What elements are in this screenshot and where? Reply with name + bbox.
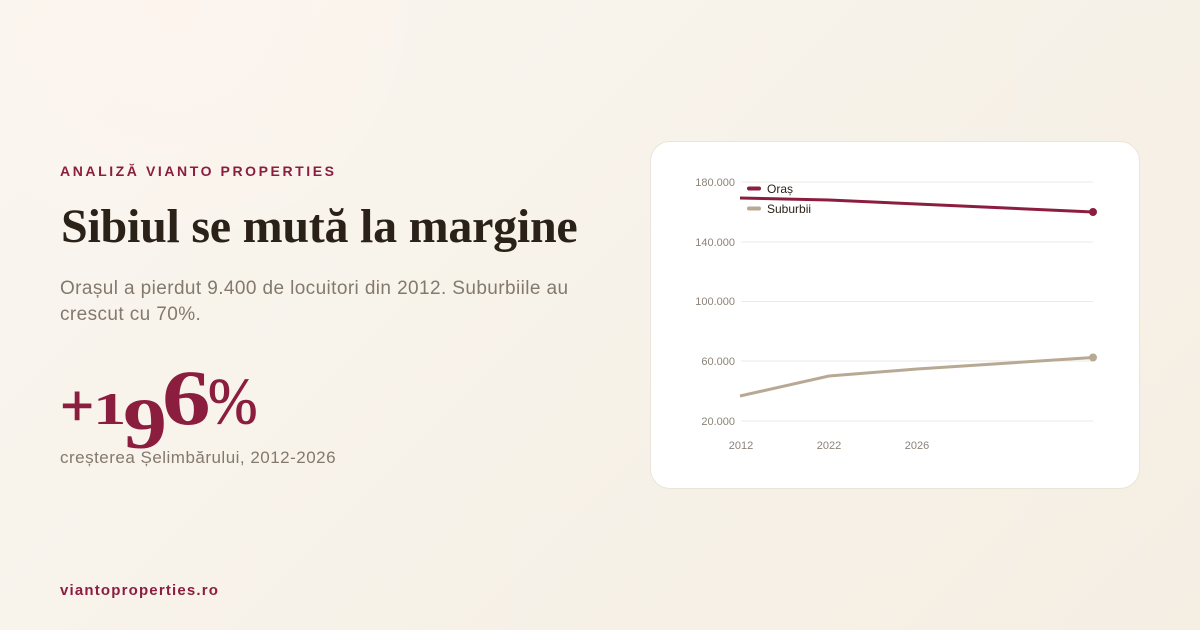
stat caption: creșterea Șelimbărului, 2012-2026 [60,448,336,467]
subtitle [60,278,568,325]
title: Sibiul se mută la margine [61,200,577,253]
y axis labels [695,177,735,428]
big stat: 6 [162,354,211,441]
big stat: + [60,373,94,439]
x axis labels: 2026 [905,440,929,452]
x axis labels: 2022 [817,440,841,452]
subtitle: Orașul a pierdut 9.400 de locuitori din 2012. Suburbiile au [60,278,568,299]
subtitle: crescut cu 70%. [60,304,201,325]
series: Oraș [740,198,1096,214]
big stat: 9 [123,384,167,464]
big stat: % [208,365,257,438]
big stat: 1 [93,383,126,434]
x axis labels: 2012 [729,440,753,452]
legend: Oraș: Oraș [767,182,793,196]
legend: Suburbii [747,202,811,216]
y axis labels: 60.000 [701,356,735,368]
website: viantoproperties.ro [60,582,219,599]
big stat [60,354,257,464]
y axis labels: 20.000 [701,416,735,428]
y axis labels: 140.000 [695,237,735,249]
line chart [695,177,1097,452]
panel: chart card [650,141,1140,489]
legend: Suburbii: Suburbii [767,202,811,216]
eyebrow label: ANALIZĂ VIANTO PROPERTIES [60,163,337,179]
y axis labels: 180.000 [695,177,735,189]
x axis labels [729,440,929,452]
legend: Oraș [747,182,793,196]
y axis labels: 100.000 [695,296,735,308]
series: Suburbii [740,355,1096,396]
